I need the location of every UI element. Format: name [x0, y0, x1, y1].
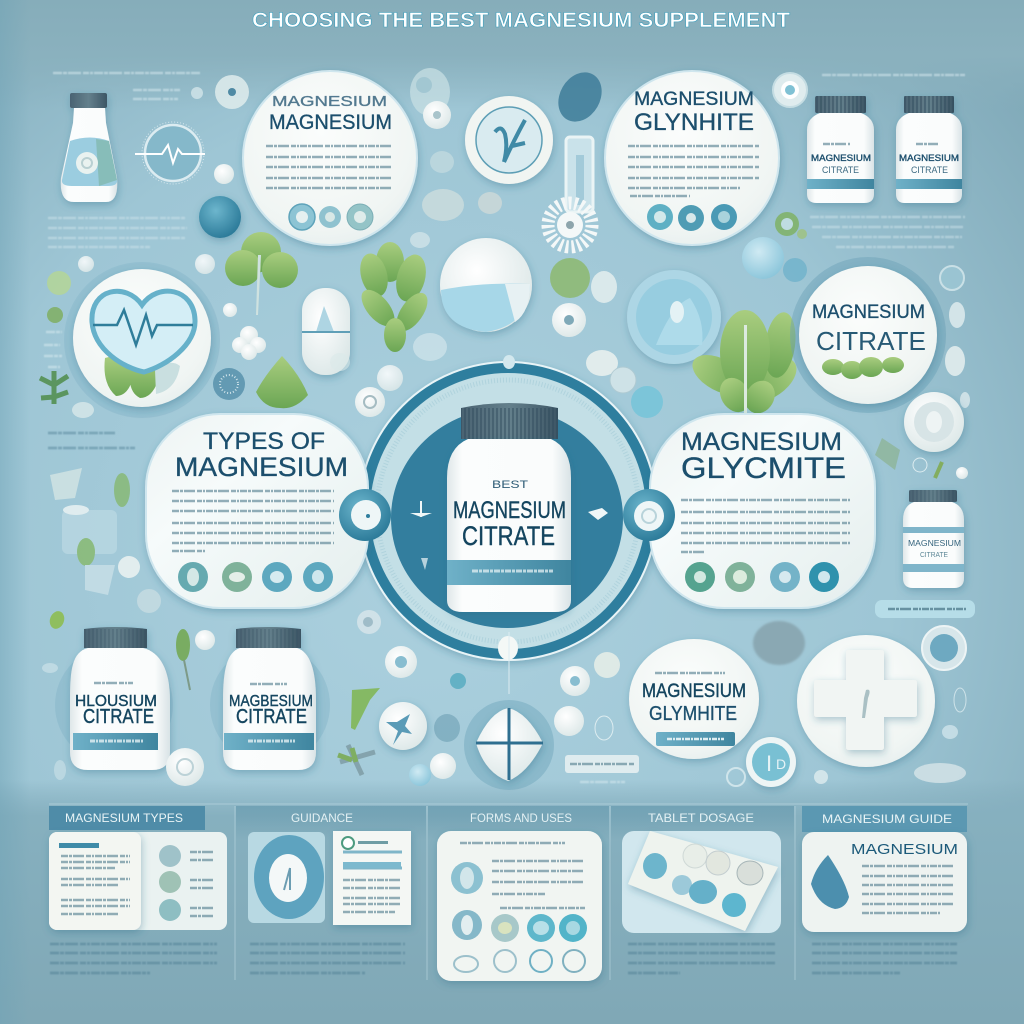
big pill — [440, 238, 532, 332]
leaf tree — [225, 232, 298, 315]
label: magnesium: MAGNESIUM — [453, 497, 566, 524]
glass collage, mid left — [50, 468, 161, 613]
column header shading — [236, 806, 794, 840]
caption text — [250, 944, 405, 973]
label band — [224, 733, 314, 750]
bottle: central product — [447, 403, 571, 612]
icon row 3 — [454, 950, 585, 972]
icon: blue drop — [550, 64, 610, 130]
label: citrate: CITRATE — [462, 521, 555, 551]
text lines, top right — [810, 75, 965, 247]
blister card — [622, 831, 781, 933]
label pill — [875, 600, 975, 618]
title: CHOOSING THE BEST MAGNESIUM SUPPLEMENT — [252, 9, 790, 32]
label text small: CITRATE — [920, 552, 948, 559]
header band: MAGNESIUM TYPES — [65, 811, 183, 825]
text block, mid left — [48, 433, 135, 448]
icon: flask bottle — [61, 93, 117, 202]
panel: magnesium glycinate blob — [650, 414, 875, 608]
icon: greens — [822, 357, 904, 379]
bottle cap — [461, 403, 558, 439]
panel: magnesium glycinate circle lower — [629, 639, 759, 759]
icon row — [647, 204, 737, 231]
icon: heart panel — [64, 262, 220, 418]
body text — [628, 146, 759, 196]
heading: types of: TYPES OF — [203, 428, 325, 455]
icon: ring bottom node — [498, 636, 518, 660]
icon: blue drop — [811, 855, 849, 909]
header text: GUIDANCE — [291, 811, 353, 825]
panel: bottom card 1 — [49, 806, 227, 973]
open booklet — [49, 832, 227, 930]
heading: magnesium: MAGNESIUM — [269, 111, 392, 134]
heading: magnesium: MAGNESIUM — [175, 452, 348, 482]
panel: bottom card 3 — [437, 811, 602, 981]
panel: bottom card 4 — [622, 811, 781, 973]
icon row 1 — [451, 862, 483, 894]
label strip — [565, 755, 639, 782]
small ring, top right — [773, 73, 807, 107]
body text — [862, 866, 955, 913]
panel: bottom card 2 — [248, 811, 411, 973]
heading: glycinate: GLYMHITE — [649, 703, 737, 725]
bottle: top right 2: CITRATE — [911, 165, 948, 175]
bottle: top right 2 — [896, 96, 962, 203]
heading: magnesium: MAGNESIUM — [642, 681, 746, 702]
textured blue disc — [627, 270, 721, 364]
caption text — [812, 944, 957, 973]
cross medallion — [797, 635, 935, 767]
label: small line — [94, 682, 133, 684]
icon: ring top node — [503, 355, 515, 369]
pebble — [753, 621, 805, 665]
heading: magnesium: MAGNESIUM — [812, 302, 925, 323]
heading: MAGNESIUM — [851, 841, 958, 858]
heading: glycinate: GLYNHITE — [634, 109, 754, 136]
panel: bottom card 5 — [802, 806, 967, 973]
intro text lines, top left — [48, 73, 200, 247]
connector node: right — [623, 489, 675, 541]
leaves, lower centre left — [338, 688, 380, 775]
bottle: top right 2: MAGNESIUM — [899, 153, 959, 163]
leaf and tablet, lower left — [42, 609, 215, 780]
document — [333, 831, 411, 925]
icon row — [685, 562, 839, 592]
body text — [460, 843, 585, 908]
bottle: top right 1: MAGNESIUM — [811, 153, 871, 163]
bottle: top right 1 — [807, 96, 874, 203]
sprig and tablets, right — [875, 438, 968, 479]
label bands — [903, 527, 964, 572]
label: magnesium: MAGBESIUM — [229, 693, 313, 710]
small marks, lower right — [727, 688, 966, 786]
icon row — [289, 204, 373, 230]
label: small line — [250, 683, 287, 685]
heading: magnesium: MAGNESIUM — [681, 428, 842, 456]
label text: MAGNESIUM — [908, 539, 961, 548]
header text: FORMS AND USES — [470, 811, 572, 825]
small tablets, centre right — [330, 258, 663, 418]
panel: magnesium glycinate circle — [605, 71, 779, 245]
body text — [266, 146, 393, 188]
heading: citrate: CITRATE — [816, 326, 926, 356]
ring: lower right — [922, 626, 966, 670]
heading: magnesium: MAGNESIUM — [634, 89, 754, 110]
small line — [655, 672, 725, 674]
circle badge — [746, 737, 796, 787]
panel: types of magnesium — [146, 414, 368, 608]
bottle body — [447, 439, 571, 612]
icon: medical cross — [814, 650, 917, 750]
heading: glycinate: GLYCMITE — [681, 452, 846, 485]
icons: green ring and spheres — [742, 212, 807, 282]
panel: magnesium circle — [243, 71, 417, 245]
bottle: magnesium citrate 1 — [55, 627, 173, 770]
bottle: magnesium citrate 2 — [210, 627, 330, 770]
big leaf plant — [686, 310, 804, 419]
glass tablets, top centre — [410, 68, 502, 248]
dividers — [49, 804, 968, 980]
icon row — [178, 562, 333, 592]
header band: MAGNESIUM GUIDE — [822, 812, 952, 826]
body text — [681, 500, 850, 552]
logo disc — [465, 96, 553, 184]
bottle: small right — [903, 490, 964, 588]
tablets, below ring — [357, 610, 620, 786]
circle badge: D — [776, 756, 786, 772]
white card — [437, 831, 602, 981]
label band — [447, 560, 571, 585]
tablet, below bottles — [166, 748, 204, 786]
body text — [172, 491, 334, 551]
icon: test tube and flower — [548, 137, 593, 247]
cross tablet — [464, 632, 554, 790]
star tablet — [379, 702, 427, 750]
label: magnesium: HLOUSIUM — [75, 693, 157, 710]
white card — [802, 832, 967, 932]
header band — [49, 806, 205, 830]
icons: flower tablet, dotted ball, leaf — [40, 271, 308, 418]
icon: capsule — [302, 288, 350, 375]
label: citrate: CITRATE — [83, 706, 154, 728]
header text: TABLET DOSAGE — [648, 811, 754, 825]
label band — [73, 733, 158, 750]
caption text — [628, 944, 775, 973]
small items, right margin — [940, 266, 970, 408]
tablet image — [248, 832, 325, 923]
header band — [802, 806, 967, 832]
circle badge: I — [766, 751, 772, 776]
icon: teal sphere — [199, 196, 241, 238]
fern — [355, 242, 434, 352]
label: best: BEST — [492, 479, 528, 491]
icon row 2 — [452, 910, 587, 942]
heading: magnesium faded: MAGNESIUM — [272, 93, 387, 110]
bottle: top right 1: CITRATE — [822, 165, 859, 175]
ring: upper right — [904, 392, 964, 452]
connector node: left — [339, 489, 391, 541]
panel: magnesium citrate circle — [790, 257, 946, 413]
caption text — [50, 944, 217, 973]
icon: heartbeat emblem — [135, 122, 205, 184]
label band — [656, 732, 735, 746]
chart ring: centre hub — [359, 355, 657, 660]
label: citrate: CITRATE — [236, 706, 307, 728]
small sparkle marks — [410, 501, 608, 570]
small pills, top left — [78, 75, 249, 317]
